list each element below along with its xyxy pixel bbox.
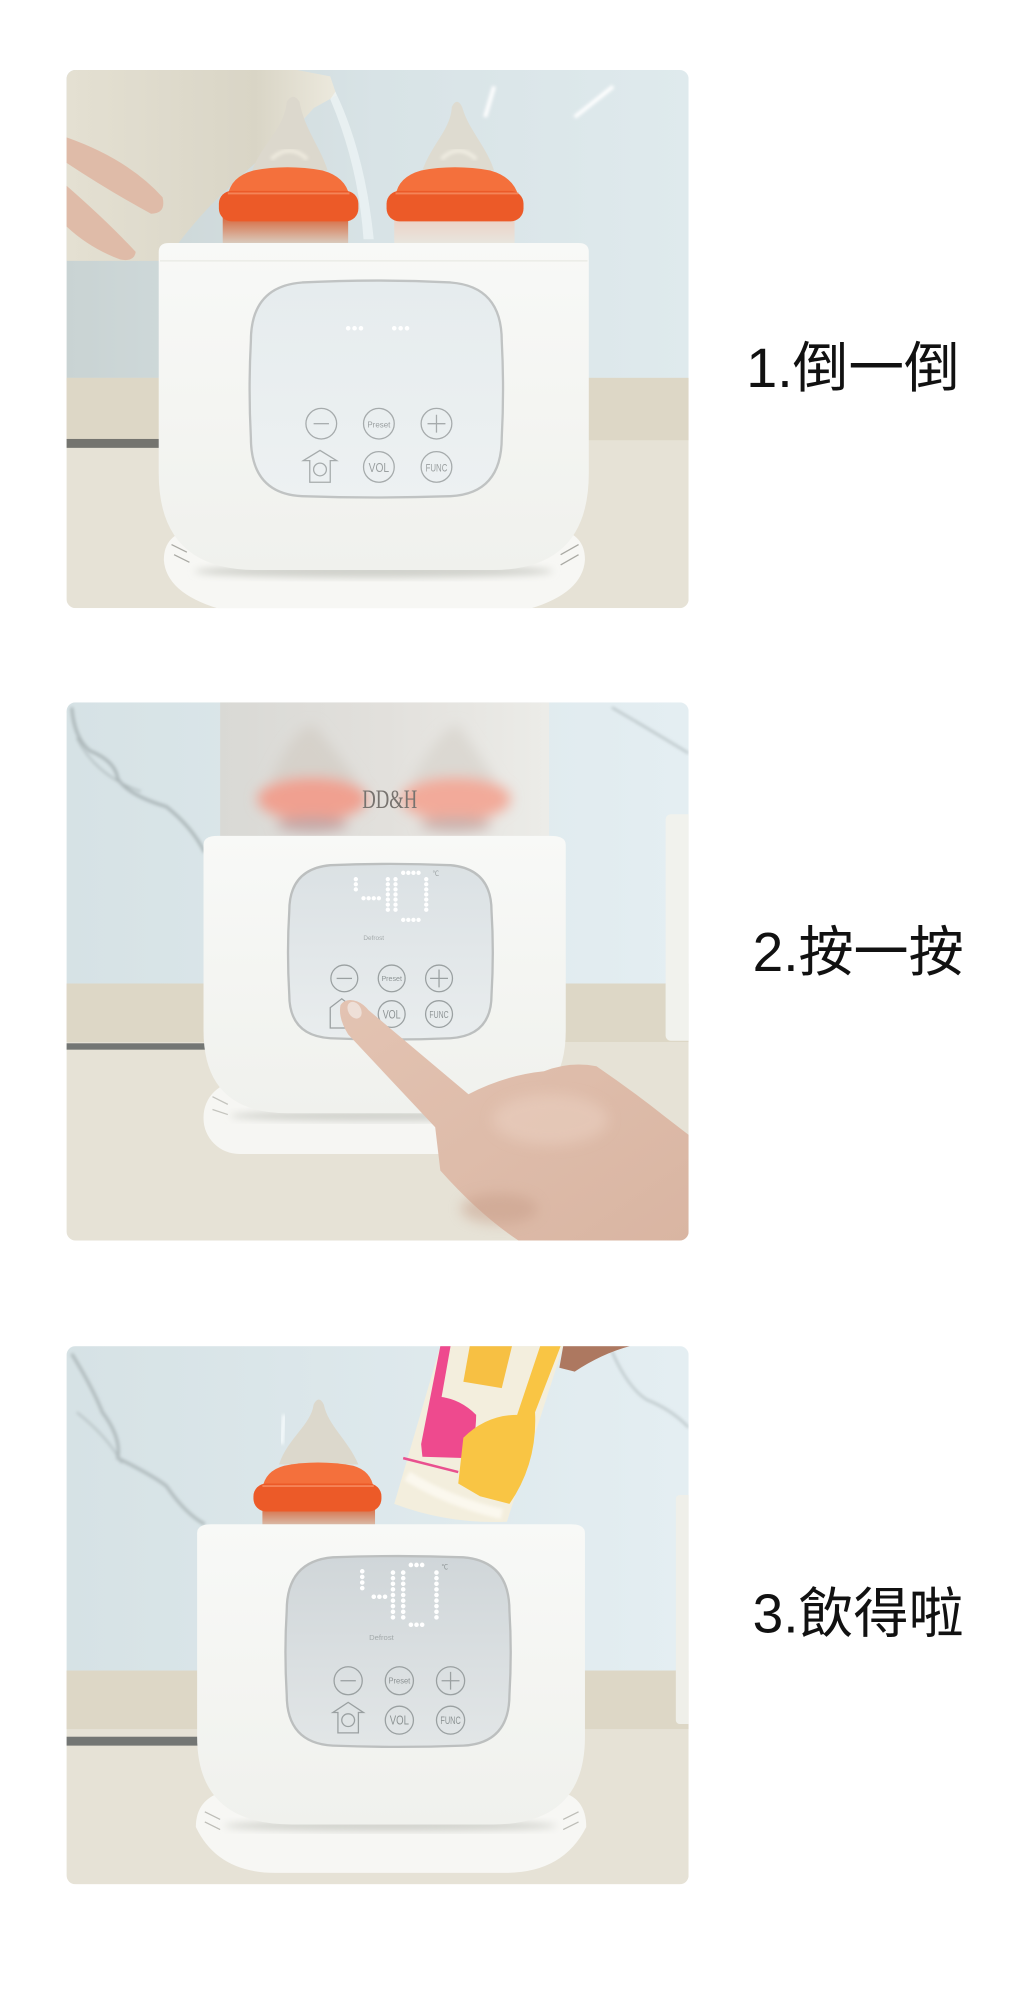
counter: [67, 378, 689, 608]
wall: [67, 70, 689, 382]
temperature dots: [356, 873, 426, 920]
wall reflections: [485, 87, 613, 117]
counter: [67, 1671, 689, 1884]
button labels: FUNC: [440, 1715, 461, 1727]
bottle left: [219, 97, 358, 244]
right object: [666, 814, 688, 1041]
warmer body: [204, 836, 566, 1113]
counter: [67, 984, 689, 1241]
button labels: VOL: [369, 460, 389, 475]
warmer body: [159, 243, 589, 570]
touch buttons: [333, 1667, 465, 1734]
touch buttons: [303, 408, 452, 482]
button labels: FUNC: [429, 1010, 449, 1021]
panel: step 2 pressing button photo: [67, 702, 694, 1241]
control panel: [288, 864, 493, 1039]
control panel: [250, 281, 503, 497]
button labels: [368, 422, 447, 472]
wall: [67, 702, 689, 985]
temperature dots: [362, 1565, 436, 1625]
kettle: [67, 70, 337, 261]
body shadow on base: [224, 1821, 557, 1831]
power cable: [67, 1737, 201, 1746]
infographic canvas: [66, 70, 962, 1884]
bottles behind lid: [257, 725, 511, 832]
milk bottle: [394, 1346, 563, 1522]
touch buttons: [330, 965, 452, 1028]
mode label: Defrost: [363, 935, 384, 942]
wall reflection: [282, 1415, 284, 1444]
marble veins: [72, 1351, 689, 1524]
hand: [67, 137, 163, 260]
button labels: VOL: [383, 1008, 401, 1021]
button labels: Preset: [381, 974, 403, 983]
body shadow on base: [234, 1110, 431, 1124]
button labels: [388, 1675, 461, 1728]
body shadow on base: [195, 565, 553, 578]
fingernail: [348, 1002, 362, 1018]
label: step 3: 3.飲得啦: [753, 1583, 964, 1644]
panel: step 3 ready to drink photo: [67, 1346, 694, 1884]
button labels: [382, 976, 448, 1018]
button labels: Preset: [367, 420, 391, 429]
display dots: [348, 326, 411, 330]
base: [204, 1088, 438, 1154]
hand holding bottle: [559, 1346, 630, 1372]
mode label: Defrost: [369, 1633, 395, 1642]
water stream: [330, 92, 374, 239]
wall: [67, 1346, 689, 1672]
button labels: VOL: [390, 1713, 409, 1728]
right object: [676, 1495, 694, 1724]
warmer body: [197, 1524, 585, 1825]
celsius mark: ℃: [433, 869, 440, 877]
bottle right: [387, 102, 524, 244]
celsius mark: ℃: [442, 1563, 449, 1571]
power cable: [67, 439, 169, 448]
control panel: [285, 1556, 511, 1747]
button labels: FUNC: [426, 462, 447, 474]
brand logo: DD&H: [362, 784, 417, 814]
button labels: Preset: [388, 1675, 411, 1685]
base: [196, 1791, 586, 1873]
power cable: [67, 1043, 207, 1050]
label: step 2: 2.按一按: [753, 921, 964, 983]
panel: step 1 pouring water photo: [67, 70, 689, 613]
base: [164, 535, 585, 608]
bottle with teat: [253, 1400, 381, 1529]
frosted lid: [220, 702, 549, 845]
hand pressing: [340, 1000, 689, 1241]
hand shading: [461, 1094, 608, 1224]
marble veins: [72, 707, 689, 852]
label: step 1: 1.倒一倒: [746, 337, 960, 399]
